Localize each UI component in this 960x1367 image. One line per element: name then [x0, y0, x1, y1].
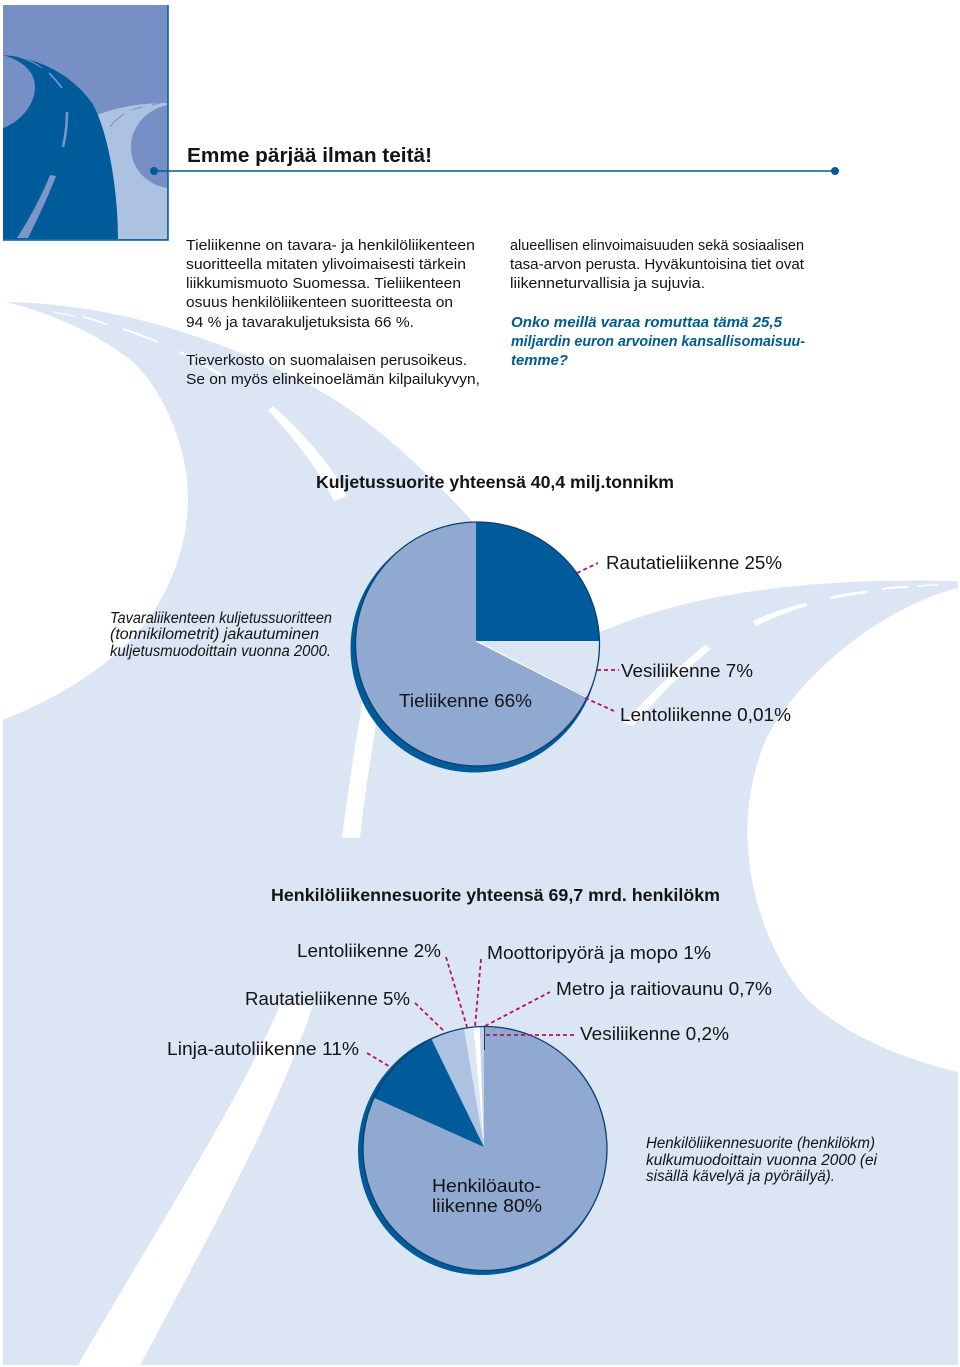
label: water 0,2%: Vesiliikenne 0,2%: [580, 1024, 729, 1044]
label: air 0,01%: Lentoliikenne 0,01%: [620, 705, 791, 725]
leaders: freight chart: [577, 563, 619, 711]
leaders: passenger chart: [367, 957, 575, 1068]
pie chart: passenger: [358, 1026, 608, 1275]
slice: rail 25%: [476, 522, 599, 641]
label: moped 1%: Moottoripyörä ja mopo 1%: [487, 943, 711, 963]
callout question: [511, 315, 805, 369]
text block: right column: [510, 238, 804, 292]
caption: passenger chart: Henkilöliikennesuorite (henkilökm): [646, 1135, 875, 1152]
text block: right column: liikenneturvallisia ja sujuvia.: [510, 276, 705, 292]
slice: moped 1%: [474, 1027, 484, 1146]
label: car 80%: [432, 1176, 542, 1216]
text block: left column: liikkumismuoto Suomessa. Tieliikenteen: [186, 276, 461, 292]
slice: metro 0,7%: [480, 1027, 484, 1138]
label: rail 25%: Rautatieliikenne 25%: [606, 553, 782, 573]
caption: passenger chart: sisällä kävelyä ja pyöräilyä).: [646, 1168, 835, 1185]
text block: left column: 94 % ja tavarakuljetuksista 66 %.: [186, 315, 414, 331]
text block: left column: [186, 238, 480, 388]
callout question: Onko meillä varaa romuttaa tämä 25,5: [511, 315, 783, 331]
heading: passenger: Henkilöliikennesuorite yhteensä 69,7 mrd. henkilökm: [271, 885, 720, 905]
text block: left column: suoritteella mitaten ylivoimaisesti tärkein: [186, 257, 466, 273]
header image: two roads: [3, 5, 168, 240]
label: air 2%: Lentoliikenne 2%: [297, 941, 441, 961]
slice: water 7%: [478, 641, 599, 696]
caption: freight chart: Tavaraliikenteen kuljetussuoritteen: [110, 610, 332, 627]
text block: left column: osuus henkilöliikenteen suoritteesta on: [186, 295, 453, 311]
slice: rail 5%: [432, 1029, 484, 1147]
caption: freight chart: kuljetusmuodoittain vuonna 2000.: [110, 643, 331, 660]
title rule with end dots: [150, 167, 839, 175]
caption: freight chart: (tonnikilometrit) jakautuminen: [110, 626, 319, 643]
callout question: temme?: [511, 353, 568, 369]
text block: left column: Tieverkosto on suomalaisen perusoikeus.: [186, 353, 467, 369]
slice: air 2%: [464, 1028, 484, 1146]
pie chart: freight: [350, 521, 600, 772]
label: road 66%: Tieliikenne 66%: [399, 691, 532, 711]
caption: passenger chart: [646, 1135, 878, 1185]
label: water 7%: Vesiliikenne 7%: [621, 661, 753, 681]
label: rail 5%: Rautatieliikenne 5%: [245, 989, 410, 1009]
text block: left column: Tieliikenne on tavara- ja henkilöliikenteen: [186, 238, 475, 254]
label: bus 11%: Linja-autoliikenne 11%: [167, 1039, 359, 1059]
caption: freight chart: [110, 610, 332, 660]
text block: right column: tasa-arvon perusta. Hyväkuntoisina tiet ovat: [510, 257, 804, 273]
heading: freight: Kuljetussuorite yhteensä 40,4 milj.tonnikm: [316, 472, 674, 492]
callout question: miljardin euron arvoinen kansallisomaisuu-: [511, 334, 805, 350]
text block: left column: Se on myös elinkeinoelämän kilpailukyvyn,: [186, 372, 480, 388]
caption: passenger chart: kulkumuodoittain vuonna 2000 (ei: [646, 1152, 878, 1169]
label: metro 0,7%: Metro ja raitiovaunu 0,7%: [556, 979, 772, 999]
title: Emme pärjää ilman teitä!: [187, 144, 432, 167]
text block: right column: alueellisen elinvoimaisuuden sekä sosiaalisen: [510, 238, 804, 254]
background: road illustration: [3, 302, 958, 1365]
slice: bus 11%: [374, 1040, 484, 1147]
label: car 80%: liikenne 80%: [432, 1196, 542, 1216]
label: car 80%: Henkilöauto-: [432, 1176, 541, 1196]
